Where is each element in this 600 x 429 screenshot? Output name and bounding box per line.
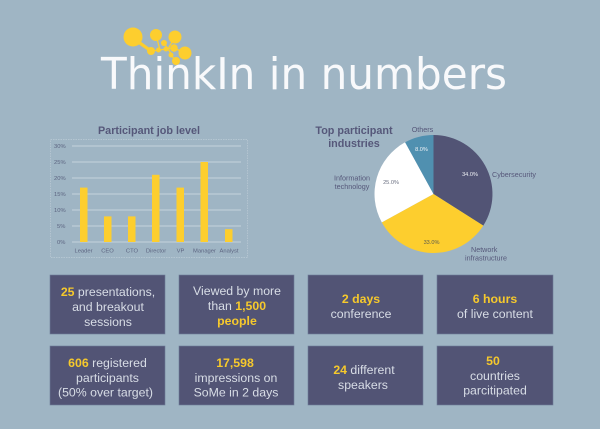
stat card: registered participants bbox=[50, 346, 165, 405]
x axis labels: VP bbox=[177, 248, 184, 254]
y axis labels: 20% bbox=[54, 176, 66, 182]
icon: ThinkIn logo bubbles bbox=[124, 28, 192, 65]
stat card: viewers: Viewed by more bbox=[193, 284, 281, 298]
stat card: speakers bbox=[308, 346, 423, 405]
x axis labels: Analyst bbox=[219, 248, 239, 254]
slice: others bbox=[405, 135, 434, 194]
y axis labels: 15% bbox=[54, 192, 66, 198]
heading: industries chart: industries bbox=[328, 138, 380, 150]
stat card: presentations bbox=[50, 275, 165, 334]
stat card: live content: 6 hours bbox=[473, 292, 517, 306]
title: ThinkIn in numbers bbox=[100, 49, 507, 100]
x axis labels: CTO bbox=[126, 248, 139, 254]
y axis labels: 30% bbox=[54, 144, 66, 150]
stat card: conference days bbox=[308, 275, 423, 334]
stat card: viewers bbox=[179, 275, 294, 334]
slice: network infrastructure bbox=[382, 194, 483, 253]
stat card: presentations: sessions bbox=[84, 315, 132, 329]
stat card: presentations: and breakout bbox=[72, 300, 144, 314]
bar chart: participant job level bbox=[50, 140, 248, 258]
slice labels: infrastructure bbox=[465, 254, 507, 262]
stat card: countries: countries bbox=[470, 369, 520, 383]
pie chart: top participant industries bbox=[334, 125, 536, 262]
slice labels: Network bbox=[471, 245, 498, 254]
slice values: 34.0% bbox=[462, 172, 478, 178]
heading: industries chart: Top participant bbox=[315, 125, 393, 137]
stat card: conference days: 2 days bbox=[342, 292, 380, 306]
y axis labels: 25% bbox=[54, 160, 66, 166]
y axis labels bbox=[54, 144, 66, 246]
stat card: speakers: 24 different bbox=[333, 363, 395, 377]
stat card: impressions: 17,598 bbox=[216, 356, 254, 370]
slice labels: Cybersecurity bbox=[492, 170, 536, 179]
stat card: presentations: 25 presentations, bbox=[61, 285, 155, 299]
stat card: viewers: people bbox=[217, 314, 257, 328]
x axis labels: CEO bbox=[101, 248, 114, 254]
y axis labels: 10% bbox=[54, 208, 66, 214]
stat card: conference days: conference bbox=[331, 307, 392, 321]
slice labels: technology bbox=[335, 182, 370, 191]
x axis labels: Director bbox=[146, 248, 166, 254]
slice labels bbox=[334, 125, 536, 262]
stat card: live content: of live content bbox=[457, 307, 534, 321]
slice values: 33.0% bbox=[424, 240, 439, 246]
stat card: speakers: speakers bbox=[338, 378, 388, 392]
slice: cybersecurity bbox=[434, 135, 492, 226]
stat card: countries bbox=[437, 346, 553, 405]
stat card: countries: parcitipated bbox=[463, 384, 527, 398]
stat card: impressions bbox=[179, 346, 294, 405]
x axis labels bbox=[74, 248, 239, 254]
slice: information technology bbox=[375, 142, 434, 222]
slice values: 8.0% bbox=[415, 147, 428, 153]
y axis labels: 5% bbox=[57, 224, 65, 230]
stat card: viewers: than 1,500 bbox=[208, 299, 266, 313]
slice values: 25.0% bbox=[383, 180, 399, 186]
stat card: registered participants: participants bbox=[76, 371, 139, 385]
heading: job level chart: Participant job level bbox=[98, 125, 200, 137]
slice values bbox=[383, 147, 478, 246]
y axis labels: 0% bbox=[57, 240, 65, 246]
stat card: countries: 50 bbox=[486, 354, 500, 368]
x axis labels: Leader bbox=[74, 248, 93, 254]
slice labels: Others bbox=[412, 125, 434, 134]
x axis labels: Manager bbox=[193, 248, 216, 254]
bars bbox=[80, 162, 232, 242]
stat card: live content bbox=[437, 275, 553, 334]
stat card: impressions: SoMe in 2 days bbox=[194, 386, 278, 400]
slice labels: Information bbox=[334, 174, 370, 182]
stat card: impressions: impressions on bbox=[195, 371, 278, 385]
stat card: registered participants: 606 registered bbox=[68, 356, 147, 370]
stat card: registered participants: (50% over target) bbox=[58, 386, 153, 400]
